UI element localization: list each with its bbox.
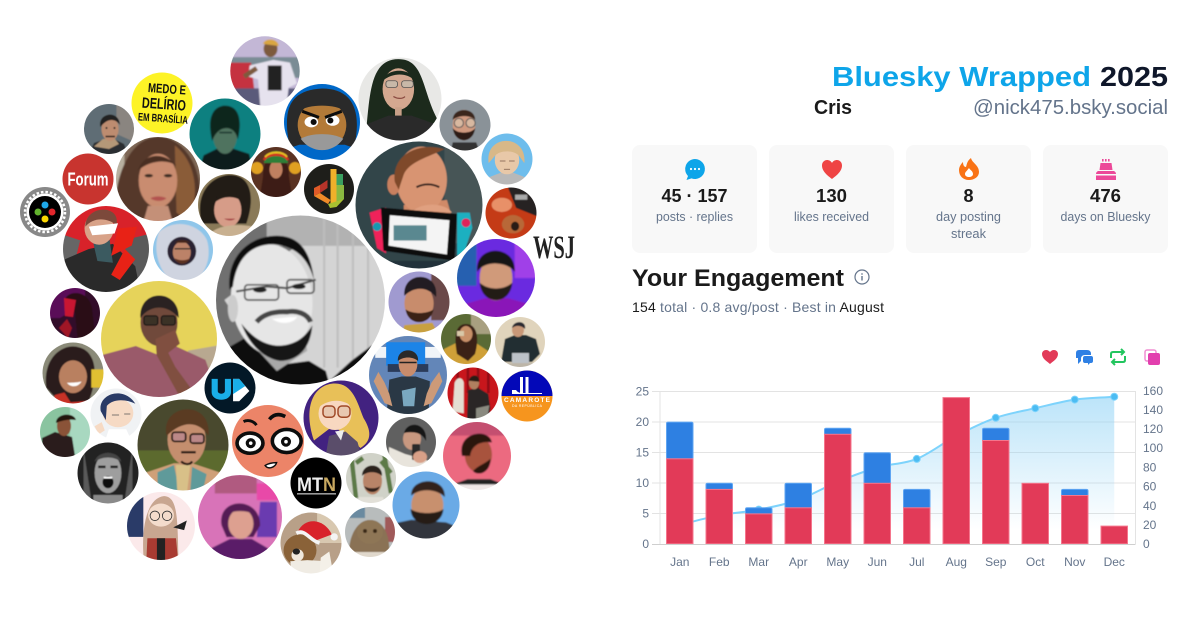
chart: monthly engagement stacked bars with cumulative line: [636, 384, 1163, 569]
icon: cake: [1096, 159, 1116, 180]
month labels: Mar: [748, 555, 769, 569]
avatar: smiling girl: [42, 342, 104, 404]
left axis labels: [636, 384, 649, 551]
avatar: main profile photo, black and white: [216, 216, 385, 384]
panel: stat card days on Bluesky: [1043, 145, 1168, 253]
avatar: Medo e Delirio em Brasilia logo: EM BRASÍLIA: [138, 110, 188, 127]
avatar: woman in red lighting: [50, 288, 100, 338]
avatar: Camarote da Republica logo: CAMAROTE: [504, 397, 551, 404]
avatar: illustrated girl with round glasses: [127, 492, 195, 560]
avatar: orange and dark blurred photo: [486, 188, 536, 238]
icon: speech bubble: [685, 159, 705, 180]
right axis labels: [1143, 384, 1163, 551]
avatar: cat: [345, 507, 395, 557]
cumulative area: [680, 397, 1114, 544]
avatar: astronaut man: [153, 220, 213, 280]
avatar: man in purple shirt with neon background: [457, 239, 535, 317]
avatar: man on red pink background: [443, 422, 511, 490]
month labels: Oct: [1026, 555, 1045, 569]
avatar: Medo e Delirio em Brasilia logo: [132, 72, 192, 134]
avatar: man with rasta hat: [251, 147, 301, 197]
avatar: man with dark hair and yellow shirt: [388, 272, 450, 332]
avatar: Forum logo: [62, 154, 114, 204]
handle: @nick475.bsky.social: [973, 97, 1168, 119]
engagement summary: 154 total · 0.8 avg/post · Best in August: [632, 299, 884, 315]
panel: stat card likes: [769, 145, 894, 253]
icon: legend repost: [1111, 349, 1125, 365]
avatar: woman on pink background: [198, 475, 282, 559]
left axis labels: 15: [636, 446, 649, 460]
avatar: man resting chin on hand, yellow wall: [101, 281, 217, 397]
right axis labels: 60: [1143, 480, 1157, 494]
avatar: blonde cartoon woman with big glasses: [304, 380, 378, 456]
avatar: man with green background: [40, 407, 90, 457]
panel: stat card streak: streak: [951, 226, 986, 241]
right axis labels: 100: [1143, 441, 1163, 455]
left axis labels: 10: [636, 476, 649, 490]
avatar: curly haired woman: [198, 174, 260, 236]
avatar: Camarote da Republica logo: DA REPÚBLICA: [512, 404, 543, 408]
avatar: man with plants behind: [346, 453, 396, 503]
right axis labels: 120: [1143, 422, 1163, 436]
title: [832, 61, 1168, 92]
month labels: [670, 555, 1125, 569]
avatar: Camarote da Republica logo: [502, 370, 552, 422]
panel: stat card posts and replies: posts · replies: [656, 209, 733, 224]
like bars: [666, 398, 1128, 544]
title: 2025: [1100, 61, 1168, 92]
cumulative points: [755, 393, 1118, 513]
right axis labels: 160: [1143, 384, 1163, 398]
panel: avatar bubble cluster: [15, 29, 578, 580]
panel: stat card streak: [906, 145, 1031, 253]
avatar: orange green logo on black: [304, 164, 354, 214]
right axis labels: 140: [1143, 403, 1163, 417]
avatar: woman drinking among plants: [436, 309, 496, 369]
avatar: blonde anime man: [482, 134, 532, 184]
month labels: Feb: [709, 555, 730, 569]
icon: info: [855, 270, 869, 284]
avatar: man seated before red curtain: [442, 362, 504, 424]
panel: stat card likes: 130: [816, 186, 847, 206]
avatar: masked anime character in red gloves: [63, 206, 149, 292]
month labels: Aug: [946, 555, 967, 569]
month labels: Dec: [1104, 555, 1125, 569]
month labels: May: [826, 555, 849, 569]
avatar: Medo e Delirio em Brasilia logo: DELÍRIO: [141, 95, 187, 115]
avatar: dog with santa hat: [280, 512, 342, 574]
month labels: Jan: [670, 555, 689, 569]
icon: legend heart: [1042, 350, 1058, 364]
icon: legend replies: [1076, 350, 1093, 365]
avatar: UD logo on navy: [204, 362, 256, 414]
panel: stat card posts and replies: [632, 145, 757, 253]
avatar: man with white t-shirt: [230, 36, 300, 106]
right axis labels: 80: [1143, 460, 1157, 474]
display name: Cris: [814, 97, 852, 119]
avatar: man speaking with laptop: [490, 312, 550, 373]
left axis labels: 25: [636, 384, 649, 398]
left axis labels: 0: [642, 537, 649, 551]
avatar: woman with dark curly hair and glasses: [358, 58, 442, 140]
title: Bluesky Wrapped: [832, 61, 1091, 92]
panel: stat card likes: likes received: [794, 209, 869, 224]
icon: flame: [959, 158, 979, 180]
left axis labels: 5: [642, 506, 649, 520]
avatar: woman with long brown hair: [116, 137, 200, 221]
heading: Your Engagement: Your Engagement: [632, 265, 844, 292]
avatar: sleepy anime boy: [90, 388, 142, 438]
avatar: Medo e Delirio em Brasilia logo: MEDO E: [148, 80, 187, 98]
month labels: Sep: [985, 555, 1007, 569]
cumulative line: [680, 397, 1114, 525]
month labels: Jun: [868, 555, 887, 569]
right axis labels: 0: [1143, 537, 1150, 551]
panel: stat card posts and replies: 45 · 157: [662, 186, 728, 206]
panel: stat card streak: 8: [963, 186, 974, 206]
avatar: person with mirror phone selfie: [386, 417, 436, 467]
avatar: MTN logo on black: [290, 458, 342, 508]
avatar: bearded man, blue sky: [392, 472, 460, 538]
right axis labels: 20: [1143, 518, 1157, 532]
avatar: man with Nintendo Switch: [356, 142, 482, 268]
avatar: salmon cartoon face: [232, 405, 304, 477]
avatar: Forum logo: Forum: [68, 170, 108, 190]
reply bars: [666, 422, 1088, 514]
panel: stat card streak: day posting: [936, 209, 1001, 224]
avatar: man with moustache: [84, 104, 134, 154]
avatar: woman on teal background: [190, 98, 260, 170]
avatar: MTN logo on black: MT: [297, 475, 323, 496]
panel: stat card days on Bluesky: 476: [1090, 186, 1121, 206]
month labels: Jul: [909, 555, 924, 569]
right axis labels: 40: [1143, 499, 1157, 513]
icon: heart: [822, 160, 842, 179]
icon: legend quote: [1145, 350, 1160, 365]
panel: stat card days on Bluesky: days on Bluesky: [1060, 209, 1151, 224]
avatar: man with tortoise glasses and patterned shirt: [138, 400, 228, 490]
left axis labels: 20: [636, 415, 649, 429]
avatar: gear gamepad logo: [20, 187, 70, 237]
avatar: WSJ logo: [528, 222, 578, 272]
avatar: screaming man in black and white: [78, 442, 138, 504]
month labels: Nov: [1064, 555, 1085, 569]
avatar: cartoon man on blue: [284, 84, 360, 160]
avatar: MTN logo on black: N: [323, 475, 336, 496]
avatar: shrugging man, blue pixel background: [369, 336, 447, 414]
avatar: man with round glasses and beard: [440, 100, 490, 150]
month labels: Apr: [789, 555, 808, 569]
avatar: WSJ logo: WSJ: [533, 230, 575, 266]
chart legend: [1042, 349, 1160, 365]
